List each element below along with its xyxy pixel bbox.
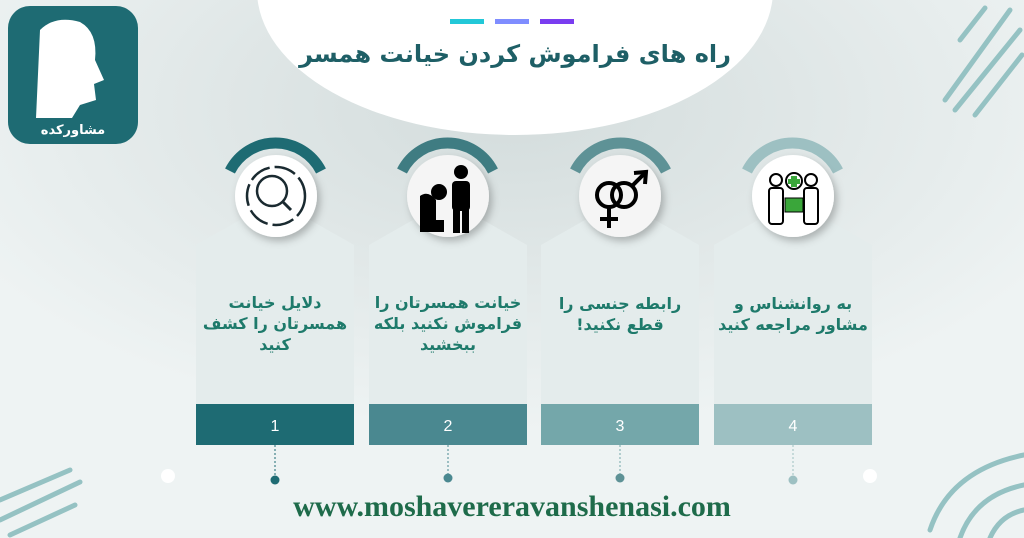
text: card 3: رابطه جنسی را قطع نکنید! <box>559 294 681 334</box>
website url: www.moshavereravanshenasi.com <box>293 490 731 523</box>
logo <box>8 6 138 144</box>
text: card 4: به روانشناس و مشاور مراجعه کنید <box>718 294 868 334</box>
card 4: 4 <box>789 418 798 435</box>
card 1: 1 <box>271 418 280 435</box>
card 1 <box>196 143 354 484</box>
card 3: 3 <box>616 418 625 435</box>
title accent bars <box>450 19 574 24</box>
title: راه های فراموش کردن خیانت همسر <box>299 40 731 68</box>
card 2 <box>369 143 527 482</box>
card 4 <box>714 143 872 484</box>
text: card 1: دلایل خیانت همسرتان را کشف کنید <box>203 293 347 354</box>
title background ellipse <box>257 0 773 135</box>
card 3 <box>541 143 699 483</box>
logo: مشاورکده <box>41 123 105 138</box>
card 2: 2 <box>444 418 453 435</box>
text: card 2: خیانت همسرتان را فراموش نکنید بلکه ببخشید <box>374 293 522 354</box>
